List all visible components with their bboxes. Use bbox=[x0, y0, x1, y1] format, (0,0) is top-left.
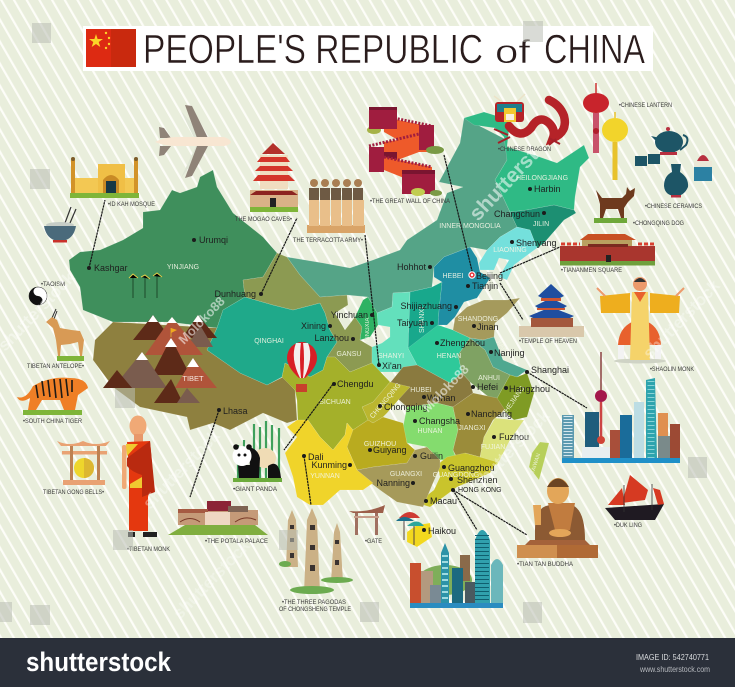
region names: NINGXIA bbox=[365, 318, 371, 342]
icon: giant panda with bamboo bbox=[232, 421, 282, 482]
image id: IMAGE ID: 542740771 bbox=[636, 652, 709, 662]
city markers and names: Hohhot bbox=[397, 262, 426, 272]
title banner bbox=[83, 26, 653, 72]
region: Anhui bbox=[458, 338, 510, 402]
attraction captions: THE TERRACOTTA ARMY• bbox=[293, 238, 363, 244]
icon: Mogao Caves bbox=[250, 143, 298, 212]
region: Heilongjiang bbox=[464, 112, 589, 212]
attraction captions: •THE THREE PAGODAS bbox=[282, 600, 346, 606]
attraction captions: •CHINESE LANTERN bbox=[619, 103, 672, 109]
region names: SHANYI bbox=[378, 353, 404, 360]
attraction captions: •TIANANMEN SQUARE bbox=[561, 268, 622, 274]
city markers and names: Jinan bbox=[477, 322, 499, 332]
attraction captions: •THE POTALA PALACE bbox=[205, 539, 268, 545]
city markers and names: Guiyang bbox=[373, 445, 407, 455]
icon: China flag bbox=[86, 29, 136, 67]
attraction captions: •CHINESE DRAGON bbox=[498, 147, 551, 153]
icon: Chongqing dog bbox=[594, 187, 635, 223]
region: Zhejiang bbox=[495, 373, 534, 420]
attraction captions: •DUK LING bbox=[614, 523, 642, 529]
icon: Tibetan mountains bbox=[103, 315, 217, 403]
region names: YINJIANG bbox=[167, 264, 199, 271]
city markers and names: Hangzhou bbox=[509, 384, 550, 394]
city markers and names: Urumqi bbox=[199, 235, 228, 245]
icon: Chinese dragon bbox=[494, 94, 565, 145]
region: Liaoning bbox=[479, 227, 537, 280]
attraction captions: •GIANT PANDA bbox=[233, 487, 277, 493]
footer bar bbox=[0, 638, 735, 687]
icon: Tibetan gong bbox=[57, 441, 110, 485]
map of China bbox=[69, 112, 589, 547]
watermark text bbox=[0, 144, 724, 623]
region: Guangdong bbox=[417, 453, 497, 507]
icon: Tibetan mountains: TIBET bbox=[182, 374, 204, 383]
icon: Beijing star bbox=[469, 272, 475, 278]
city markers and names: Kashgar bbox=[94, 263, 128, 273]
icon: Three Pagodas bbox=[279, 508, 353, 594]
icon: Shanghai skyline bbox=[562, 352, 680, 463]
icon: Hong Kong skyline bbox=[410, 530, 503, 608]
city markers and names: Xi'an bbox=[382, 361, 402, 371]
region names: YUNNAN bbox=[310, 473, 340, 480]
city markers and names: Harbin bbox=[534, 184, 561, 194]
shutterstock logo: shutterstock bbox=[26, 647, 172, 677]
icon: yin yang bbox=[29, 287, 47, 305]
city markers and names: Shijiazhuang bbox=[400, 301, 452, 311]
icon: Shaolin monk bbox=[597, 277, 684, 364]
region: Inner Mongolia bbox=[287, 118, 517, 313]
region: Shanxi bbox=[408, 282, 442, 348]
city markers and names: Dali bbox=[308, 452, 324, 462]
icon: Tibetan monk bbox=[122, 416, 157, 537]
region names: HUNAN bbox=[418, 428, 442, 435]
region names: TAIWAN bbox=[530, 453, 542, 475]
icon: Chinese ceramics bbox=[635, 127, 712, 198]
attraction captions: THE MOGAO CAVES• bbox=[235, 217, 292, 223]
region names: HUBEI bbox=[410, 387, 432, 394]
region: Chongqing bbox=[362, 382, 410, 423]
attraction captions: •ID KAH MOSQUE bbox=[108, 202, 155, 208]
region names: SHANXI bbox=[419, 307, 426, 333]
icon: Chinese lanterns bbox=[583, 83, 628, 180]
city markers and names: Xining bbox=[301, 321, 326, 331]
attraction captions: •GATE bbox=[365, 539, 382, 545]
watermark text: Moloko88 bbox=[419, 362, 472, 415]
city markers and names: Nanning bbox=[376, 478, 410, 488]
icon: Temple of Heaven bbox=[519, 284, 584, 337]
region names: QINGHAI bbox=[254, 338, 284, 345]
region: Sichuan bbox=[282, 357, 390, 450]
icon: Great Wall bbox=[367, 107, 444, 196]
region names bbox=[167, 175, 568, 480]
watermark text: shutterst bbox=[465, 144, 543, 225]
region: Jiangxi bbox=[453, 393, 505, 460]
watermark text: shutterstock bbox=[639, 276, 724, 363]
city markers and names: Beijing bbox=[476, 271, 503, 281]
attraction captions: OF CHONGSHENG TEMPLE bbox=[279, 607, 351, 613]
attraction captions bbox=[23, 103, 702, 613]
city markers and names: Tianjin bbox=[472, 281, 498, 291]
region: Jiangsu bbox=[470, 337, 527, 377]
city markers and names: Guilin bbox=[420, 451, 443, 461]
attraction captions: •TIBETAN MONK bbox=[127, 547, 170, 553]
icon: Tian Tan Buddha bbox=[517, 478, 598, 558]
city markers and names: Shenzhen bbox=[457, 475, 498, 485]
city markers and names: Fuzhou bbox=[499, 432, 529, 442]
city markers and names: Shenyang bbox=[516, 238, 557, 248]
attraction captions: •TIAN TAN BUDDHA bbox=[517, 562, 573, 568]
watermark text: Moloko88 bbox=[175, 294, 228, 347]
region names: GUANGDONG bbox=[433, 472, 479, 479]
region: Taiwan bbox=[529, 442, 549, 480]
city markers and names: Nanchang bbox=[471, 409, 512, 419]
city markers and names: Macau bbox=[430, 496, 457, 506]
region: Gansu bbox=[243, 253, 372, 372]
attraction captions: •THE GREAT WALL OF CHINA bbox=[370, 199, 450, 205]
city markers and names: Wuhan bbox=[427, 393, 455, 403]
city markers and names: Shanghai bbox=[531, 365, 569, 375]
city markers and names: Lanzhou bbox=[314, 333, 349, 343]
city markers and names: Taiyuan bbox=[397, 318, 428, 328]
watermark text: shutterstock bbox=[469, 406, 554, 493]
city markers and names: Chongqing bbox=[384, 402, 428, 412]
website: www.shutterstock.com bbox=[639, 664, 710, 674]
icon: wind turbines bbox=[129, 273, 162, 298]
city markers and names: HONG KONG bbox=[458, 487, 502, 494]
region names: HEBEI bbox=[442, 273, 464, 280]
city markers and names: Zhengzhou bbox=[440, 338, 485, 348]
watermark text: shutterstock bbox=[139, 426, 224, 513]
icon: gate bbox=[349, 505, 385, 535]
city markers and names: Nanjing bbox=[494, 348, 525, 358]
region: Shandong bbox=[453, 298, 520, 340]
region names: JIANGXI bbox=[458, 425, 486, 432]
region names: SICHUAN bbox=[319, 399, 351, 406]
city markers and names bbox=[87, 184, 569, 536]
icon: airplane bbox=[155, 105, 231, 178]
city markers and names: Changchun bbox=[494, 209, 540, 219]
region names: ZHEJIANG bbox=[501, 385, 527, 417]
icon: beach umbrellas bbox=[396, 512, 424, 545]
city markers and names: Hefei bbox=[477, 382, 498, 392]
attraction captions: •CHINESE CERAMICS bbox=[645, 204, 702, 210]
region: Guangxi bbox=[357, 447, 440, 507]
attraction captions: •CHONGQING DOG bbox=[633, 221, 684, 227]
city markers and names: Guangzhou bbox=[448, 463, 495, 473]
region names: ANHUI bbox=[478, 375, 500, 382]
region: Hubei bbox=[390, 365, 473, 407]
icon: Potala Palace bbox=[168, 501, 268, 535]
city markers and names: Chengdu bbox=[337, 379, 374, 389]
watermark text: shutterstock bbox=[169, 536, 254, 623]
region names: CHONGQING bbox=[369, 382, 403, 420]
region: Tibet bbox=[93, 322, 297, 430]
icon: Tibetan antelope bbox=[46, 309, 84, 361]
attraction captions: •TAOISM bbox=[41, 282, 65, 288]
region: Qinghai bbox=[207, 297, 337, 385]
attraction captions: •TEMPLE OF HEAVEN bbox=[519, 339, 577, 345]
region names: GUANGXI bbox=[390, 471, 422, 478]
icon: Id Kah Mosque bbox=[70, 157, 139, 198]
region: Hunan bbox=[403, 403, 458, 460]
region names: HENAN bbox=[437, 353, 461, 360]
attraction captions: TIBETAN GONG BELLS• bbox=[43, 490, 104, 496]
attraction captions: •SOUTH CHINA TIGER bbox=[23, 419, 83, 425]
region: Hebei bbox=[434, 247, 490, 325]
region: Hainan bbox=[407, 523, 432, 547]
region names: FUJIAN bbox=[481, 444, 505, 451]
icon: South China tiger bbox=[17, 378, 88, 415]
region: Shaanxi bbox=[363, 292, 417, 372]
region names: GANSU bbox=[337, 351, 361, 358]
icon: Terracotta Army bbox=[307, 179, 365, 233]
region names: JILIN bbox=[533, 221, 549, 228]
region: Henan bbox=[408, 325, 470, 383]
icon: noodle bowl bbox=[44, 207, 76, 242]
title text: CHINA bbox=[544, 26, 646, 72]
city markers and names: Dunhuang bbox=[214, 289, 256, 299]
region names: HEILONGJIANG bbox=[516, 175, 568, 182]
title text: of bbox=[495, 33, 531, 70]
city markers and names: Haikou bbox=[428, 526, 456, 536]
city markers and names: Yinchuan bbox=[331, 310, 368, 320]
region: Fujian bbox=[480, 418, 524, 465]
region names: LIAONING bbox=[493, 247, 527, 254]
region names: SHANDONG bbox=[458, 316, 498, 323]
city markers and names: Lhasa bbox=[223, 406, 248, 416]
city markers and names: Changsha bbox=[419, 416, 460, 426]
region: Yunnan bbox=[285, 420, 373, 505]
icon: Tiananmen bbox=[560, 234, 655, 266]
region: Guizhou bbox=[347, 417, 415, 470]
title text: PEOPLE'S REPUBLIC bbox=[143, 26, 483, 72]
icon: junk boat bbox=[605, 475, 664, 520]
region: Jilin bbox=[510, 205, 576, 248]
city markers and names: Kunming bbox=[311, 460, 347, 470]
icon: hot air balloon bbox=[287, 342, 317, 392]
region: Ningxia bbox=[355, 297, 378, 340]
region: Xinjiang bbox=[69, 170, 277, 328]
attraction captions: TIBETAN ANTELOPE• bbox=[27, 364, 84, 370]
attraction captions: •SHAOLIN MONK bbox=[650, 367, 694, 373]
leader lines bbox=[89, 155, 587, 535]
region names: INNER MONGOLIA bbox=[439, 223, 501, 230]
region names: JIANGSU bbox=[494, 338, 519, 366]
region names: GUIZHOU bbox=[364, 441, 396, 448]
